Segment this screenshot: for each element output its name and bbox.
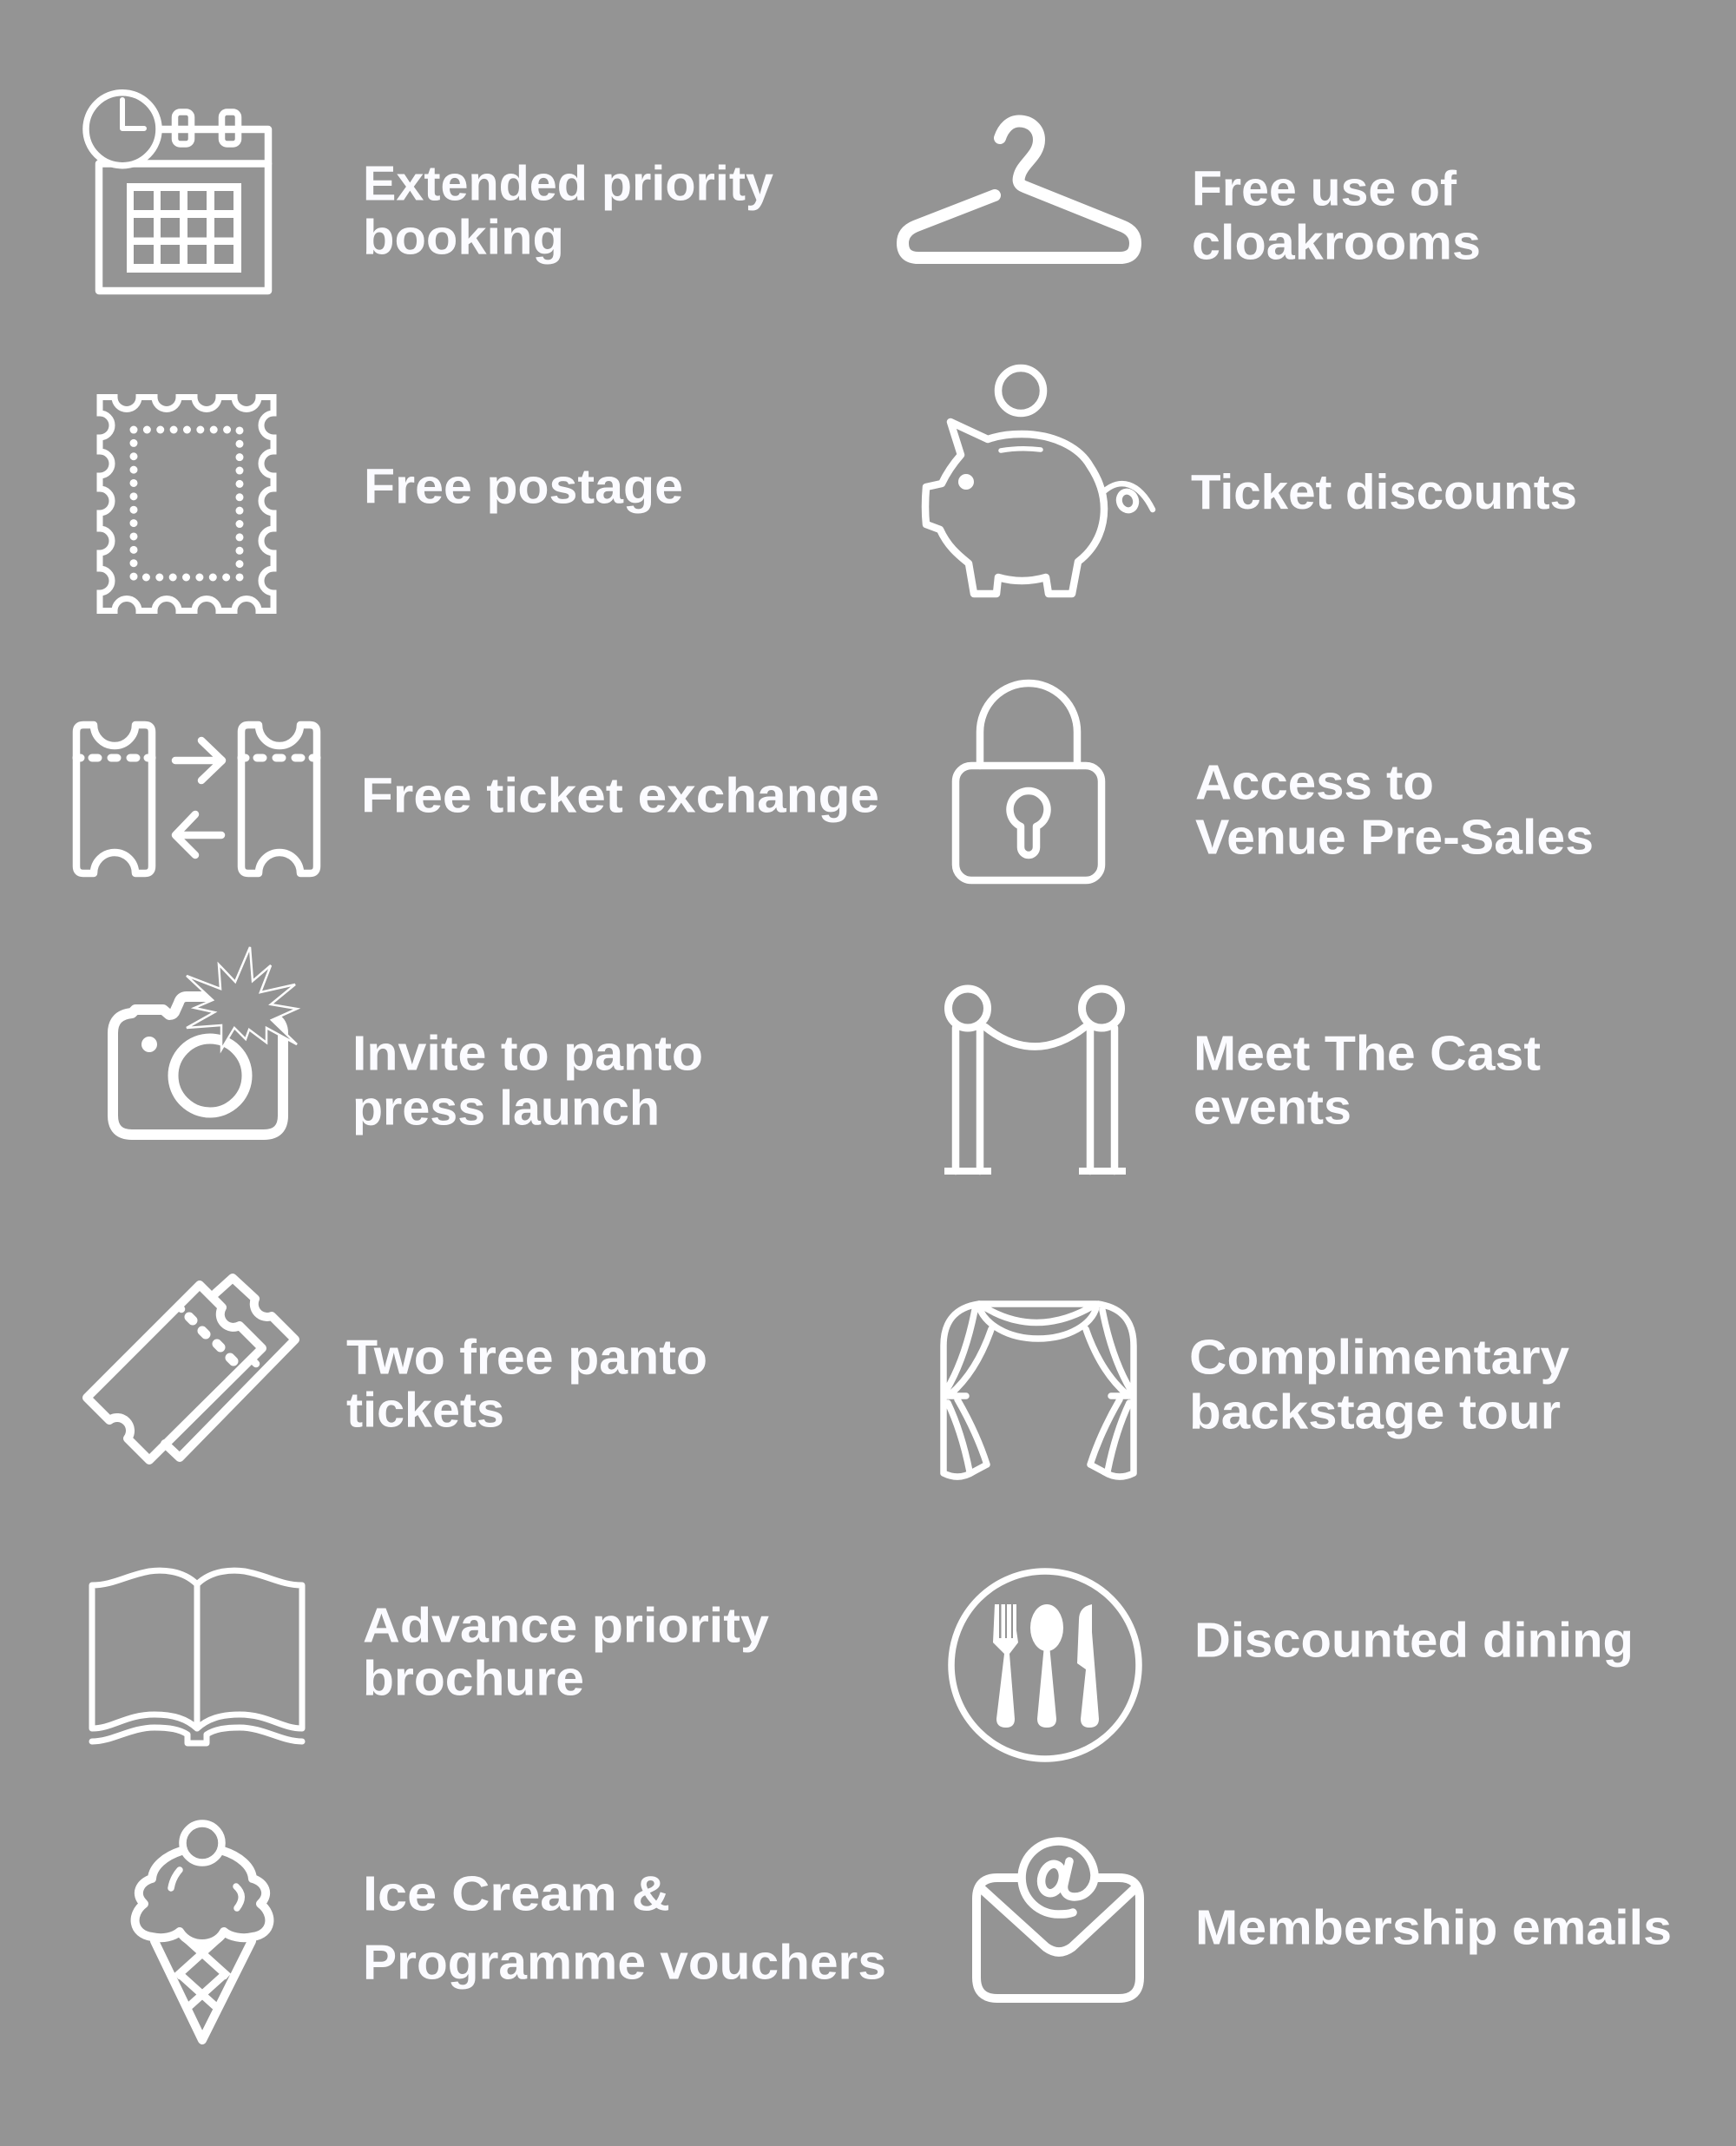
label: cloakrooms (1192, 215, 1481, 271)
benefit: two free panto tickets (87, 1278, 707, 1460)
label: Programme vouchers (363, 1934, 886, 1990)
label (1189, 1330, 1569, 1439)
label: Complimentary (1189, 1330, 1569, 1386)
label: Ticket discounts (1191, 464, 1577, 520)
icon: envelope with at sign (976, 1841, 1140, 1998)
icon: calendar with clock (86, 93, 268, 291)
label (363, 156, 773, 266)
label (1192, 161, 1481, 271)
label: backstage tour (1189, 1384, 1561, 1439)
benefit: free postage (100, 398, 683, 611)
label (1194, 1026, 1541, 1136)
benefit: membership emails (976, 1841, 1672, 1998)
label (1195, 755, 1594, 865)
icon: camera with flash (113, 947, 297, 1135)
benefit: access to venue pre-sales (956, 683, 1594, 880)
icon: open book (92, 1570, 302, 1743)
label: press launch (352, 1080, 660, 1136)
benefit: free ticket exchange (76, 725, 879, 873)
label: booking (363, 210, 564, 266)
benefit: free use of cloakrooms (903, 122, 1481, 271)
label (363, 1866, 886, 1990)
benefit: advance priority brochure (92, 1570, 769, 1743)
icon: two angled tickets (87, 1278, 295, 1460)
label: Venue Pre-Sales (1195, 809, 1594, 865)
label: Free use of (1192, 161, 1457, 217)
label: Invite to panto (352, 1026, 703, 1082)
icon: postage stamp (100, 398, 273, 611)
icon: ice cream cone (135, 1823, 269, 2040)
icon: theatre curtains (944, 1304, 1134, 1477)
benefit: ice cream and programme vouchers (135, 1823, 886, 2040)
label: Ice Cream & (363, 1866, 670, 1922)
label: Two free panto (346, 1330, 707, 1386)
label: Membership emails (1195, 1899, 1672, 1955)
label: Meet The Cast (1194, 1026, 1541, 1082)
label (346, 1330, 707, 1438)
label: Access to (1195, 755, 1434, 811)
label: Free postage (364, 458, 683, 514)
icon: piggy bank with coin (925, 368, 1153, 594)
benefit: discounted dining (951, 1571, 1634, 1759)
label: Advance priority (363, 1597, 769, 1653)
label: events (1194, 1080, 1351, 1136)
icon: two tickets with swap arrows (76, 725, 317, 873)
benefit: meet the cast events (944, 989, 1541, 1175)
label: Discounted dining (1194, 1613, 1634, 1669)
label: brochure (363, 1651, 584, 1707)
icon: padlock (956, 683, 1101, 880)
label: Free ticket exchange (361, 767, 879, 823)
benefit: ticket discounts (925, 368, 1577, 594)
icon: coat hanger (903, 122, 1135, 258)
benefit: invite to panto press launch (113, 947, 703, 1136)
label: tickets (346, 1382, 504, 1438)
icon: rope barrier (944, 989, 1126, 1175)
icon: plate with cutlery (951, 1571, 1139, 1759)
benefit: extended priority booking (86, 93, 773, 291)
label (363, 1597, 769, 1707)
label: Extended priority (363, 156, 773, 212)
label (352, 1026, 703, 1136)
benefit: complimentary backstage tour (944, 1304, 1569, 1477)
